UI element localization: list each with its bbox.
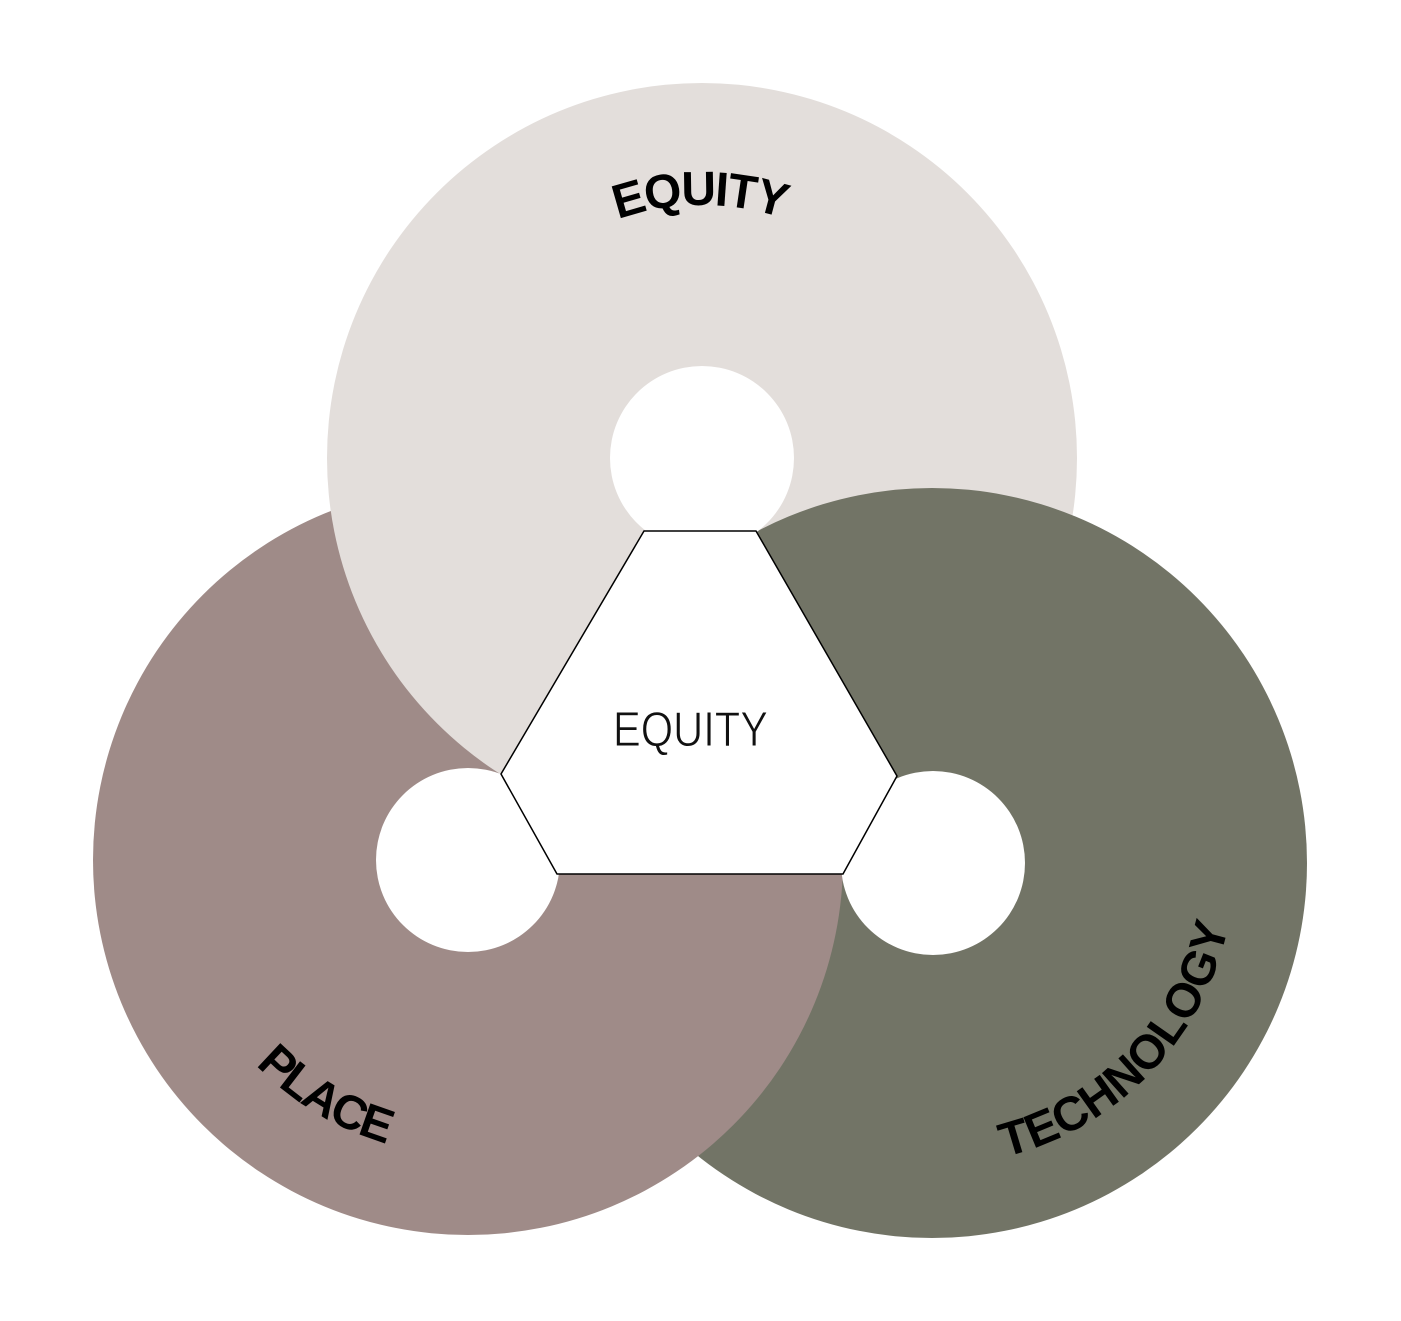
ring label: equity: EQUITY <box>612 172 792 218</box>
circle: technology <box>557 488 1307 1238</box>
hole: place circle <box>376 768 560 952</box>
ring label: technology: TECHNOLOGY <box>996 918 1226 1154</box>
ring label: place: PLACE <box>258 1043 395 1144</box>
center label: equity: EQUITY <box>613 703 768 757</box>
central hexagon <box>501 531 897 874</box>
circle: equity <box>327 83 1077 833</box>
diagram: three overlapping rings around a central hexagon <box>93 83 1307 1238</box>
overlap: equity over place <box>330 485 646 774</box>
circle: place <box>93 485 843 1235</box>
hole: equity circle <box>610 366 794 550</box>
hole: technology circle <box>841 771 1025 955</box>
